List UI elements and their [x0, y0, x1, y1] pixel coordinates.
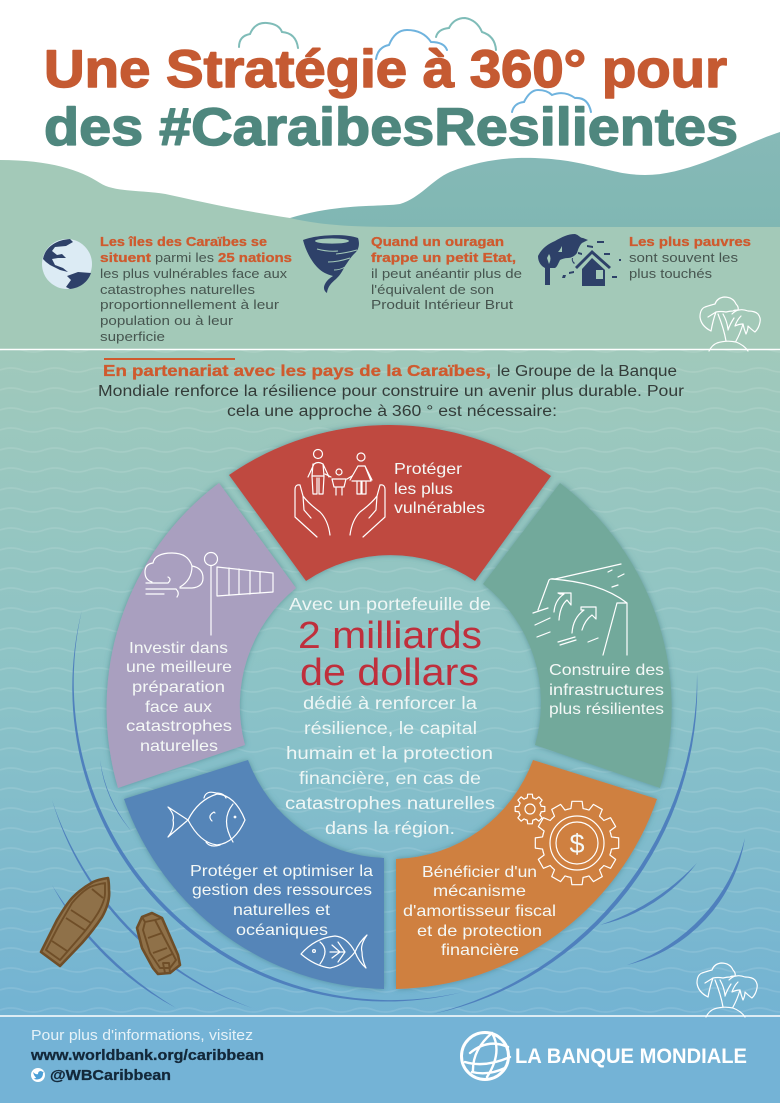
center text: humain et la protection	[286, 743, 493, 763]
band: hills background	[0, 0, 780, 350]
text: hurricane: l'équivalent de son	[371, 282, 494, 297]
text: protect vulnerable	[394, 461, 485, 517]
intro paragraph: Mondiale renforce la résilience pour construire un avenir plus durable. Pour	[98, 383, 684, 400]
swirl arcs	[52, 610, 745, 1014]
text: hurricane: il peut anéantir plus de	[371, 266, 522, 281]
segment: red	[229, 425, 551, 581]
title	[44, 40, 738, 157]
text: islands: proportionnellement à leur	[100, 297, 280, 312]
text: hurricane: Quand un ouragan	[371, 234, 504, 249]
icon: gears and dollar	[515, 794, 619, 885]
center text: catastrophes naturelles	[285, 793, 495, 813]
footer text: @WBCaribbean	[50, 1067, 171, 1084]
text: fiscal buffer: Bénéficier d'un	[422, 864, 537, 881]
icon: wind sock and cloud	[145, 552, 273, 635]
text: fiscal buffer: mécanisme	[433, 883, 526, 900]
text: ocean resources	[190, 863, 373, 939]
icon: wire globe	[462, 1032, 510, 1080]
ring diagram	[107, 425, 672, 989]
text: islands: population ou à leur	[100, 313, 234, 328]
logo: La Banque Mondiale: LA BANQUE MONDIALE	[515, 1045, 747, 1068]
segment: blue	[124, 760, 384, 989]
text: build infrastructure: Construire des	[549, 662, 664, 679]
icon: tree and house	[538, 234, 621, 286]
text: ocean resources: gestion des ressources	[192, 882, 372, 899]
center text	[285, 594, 495, 838]
icon: globe	[42, 239, 92, 289]
text: islands: parmi les	[155, 250, 215, 265]
icon: sea wall	[533, 564, 627, 655]
hill: right	[290, 132, 780, 230]
text: hurricane	[371, 234, 522, 312]
icon: fish top	[168, 792, 245, 846]
text: islands: catastrophes naturelles	[100, 282, 256, 297]
center text: dédié à renforcer la	[303, 693, 477, 713]
text: preparedness: face aux	[145, 699, 212, 716]
segment: orange	[396, 760, 657, 989]
text: islands: 25 nations	[218, 250, 292, 265]
segment: purple	[107, 483, 296, 788]
icon: twitter	[31, 1068, 45, 1082]
title line 2: des #CaraibesResilientes	[44, 98, 738, 157]
text: preparedness	[126, 640, 232, 755]
icon: fish bottom	[301, 935, 367, 968]
hill: left and green band	[0, 160, 780, 350]
text: ocean resources: Protéger et optimiser la	[190, 863, 373, 880]
text: islands: Les îles des Caraïbes se	[100, 234, 267, 249]
center text: résilience, le capital	[304, 718, 477, 738]
footer text: www.worldbank.org/caribbean	[30, 1047, 264, 1064]
text: protect vulnerable: les plus	[394, 481, 453, 498]
title line 1: Une Stratégie à 360° pour	[44, 40, 727, 99]
logo: La Banque Mondiale	[462, 1032, 747, 1080]
intro paragraph: cela une approche à 360 ° est nécessaire:	[227, 403, 557, 420]
text: build infrastructure	[549, 662, 664, 718]
intro paragraph	[98, 358, 684, 420]
icon: gears and dollar: $	[569, 829, 585, 859]
text: fiscal buffer	[403, 864, 556, 959]
icon: boat large	[41, 878, 109, 966]
icon: family in hands	[295, 450, 385, 537]
segment: green	[483, 483, 672, 788]
text: islands	[100, 234, 292, 344]
footer background	[0, 1017, 780, 1103]
text: fiscal buffer: et de protection	[417, 923, 542, 940]
text: ocean resources: naturelles et	[233, 902, 331, 919]
clouds	[239, 18, 591, 112]
icon: palm island bottom	[697, 963, 757, 1017]
info block: islands	[42, 234, 292, 344]
text: poorest: sont souvent les	[629, 250, 739, 265]
text: hurricane: Produit Intérieur Brut	[371, 297, 513, 312]
text: protect vulnerable: vulnérables	[394, 500, 485, 517]
icon: palm island top	[700, 297, 760, 351]
text: poorest: Les plus pauvres	[629, 234, 751, 249]
center text: dans la région.	[325, 818, 455, 838]
text: fiscal buffer: financière	[441, 942, 519, 959]
footer text: Pour plus d'informations, visitez	[31, 1027, 253, 1044]
center text: Avec un portefeuille de	[289, 594, 491, 614]
segment shapes	[107, 425, 672, 989]
text: preparedness: une meilleure	[126, 659, 232, 676]
text: islands: situent	[100, 250, 152, 265]
text: ocean resources: océaniques	[236, 922, 328, 939]
center text: de dollars	[300, 652, 479, 694]
icon: tornado	[303, 235, 359, 293]
text: islands: superficie	[100, 329, 165, 344]
text: preparedness: préparation	[132, 679, 225, 696]
sea background with waves	[0, 350, 780, 1017]
text: preparedness: naturelles	[140, 738, 218, 755]
info block: poorest	[538, 234, 751, 286]
center text: 2 milliards	[298, 615, 482, 657]
text: build infrastructure: infrastructures	[549, 682, 664, 699]
text: poorest	[629, 234, 751, 281]
text: islands: les plus vulnérables face aux	[100, 266, 288, 281]
text: build infrastructure: plus résilientes	[549, 701, 664, 718]
text: preparedness: catastrophes	[126, 718, 232, 735]
text: poorest: plus touchés	[629, 266, 713, 281]
center text: financière, en cas de	[299, 768, 481, 788]
icon: boat small	[137, 913, 180, 974]
intro paragraph: En partenariat avec les pays de la Caraïbes,	[103, 363, 491, 380]
text: fiscal buffer: d'amortisseur fiscal	[403, 903, 556, 920]
text: hurricane: frappe un petit Etat,	[371, 250, 516, 265]
text: preparedness: Investir dans	[129, 640, 228, 657]
info block: hurricane	[303, 234, 522, 312]
intro paragraph: le Groupe de la Banque	[497, 363, 677, 380]
text: protect vulnerable: Protéger	[394, 461, 463, 478]
footer text	[30, 1027, 264, 1084]
